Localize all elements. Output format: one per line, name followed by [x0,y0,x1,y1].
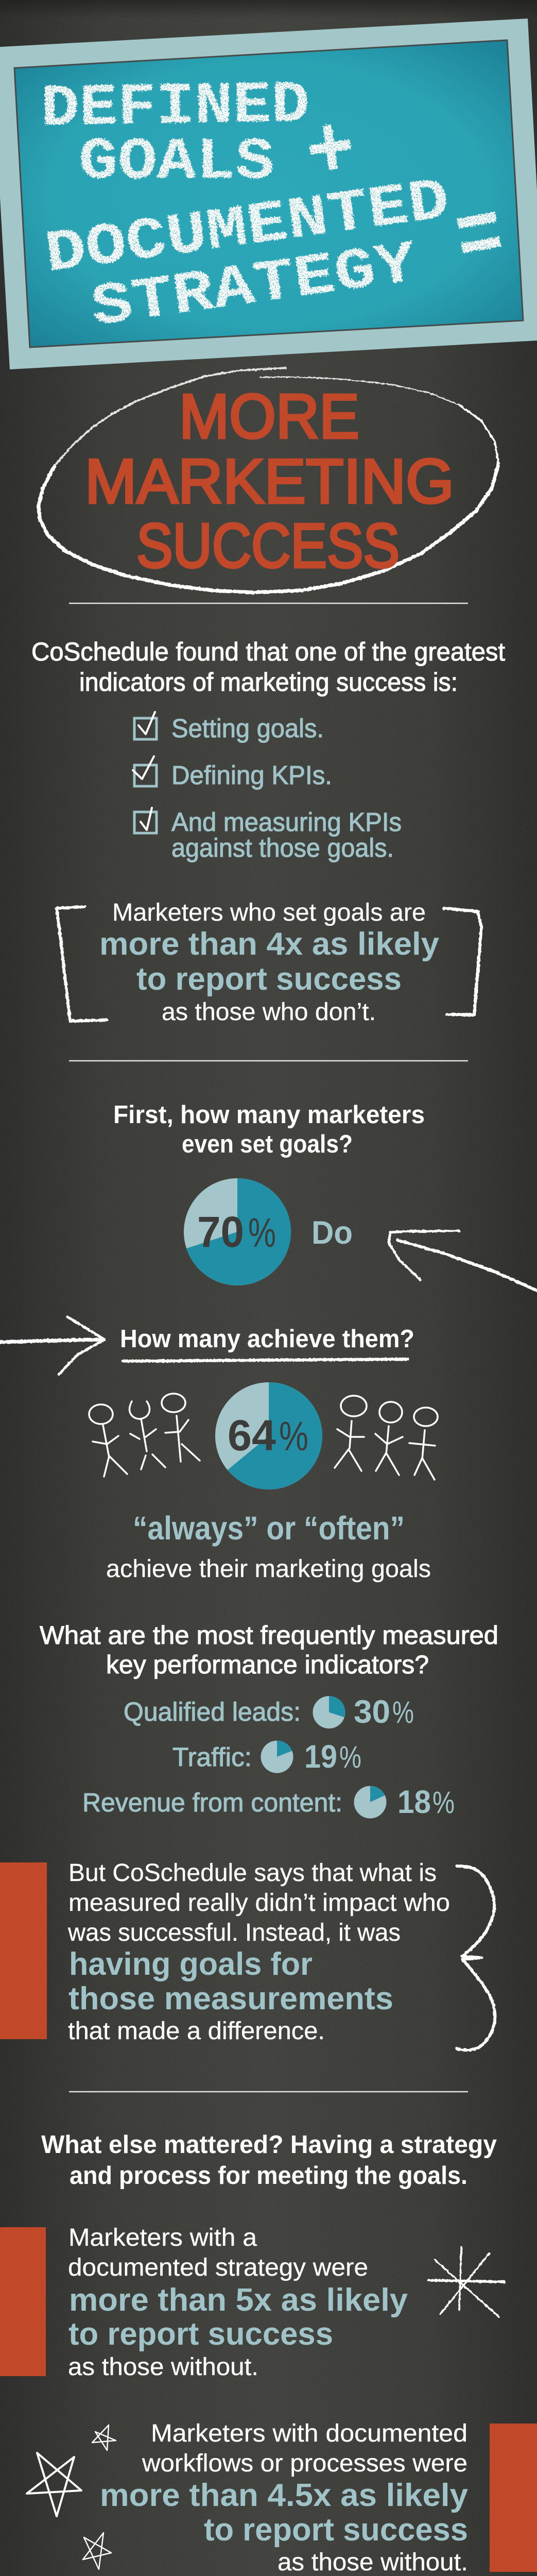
checklist item: defining KPIs [133,756,332,790]
stat: qualified leads 30% [124,1694,414,1730]
red accent bar [490,2424,537,2572]
heading: What are the most frequently measured [40,1621,498,1650]
stat: revenue from content 18%: 18 [397,1784,431,1820]
intro heading: indicators of marketing success is: [79,668,458,697]
pie chart: 64%: % [279,1413,308,1459]
body text: that made a difference. [68,2018,325,2045]
chalk underline [123,1359,408,1361]
body text: to report success [204,2512,468,2548]
section: how many marketers set goals [113,1101,537,1291]
caption: “always” or “often” [133,1510,405,1547]
panel: documented strategy 5x [0,2224,505,2381]
body text [100,2420,469,2576]
red accent bar [0,1862,47,2039]
body text: workflows or processes were [142,2450,467,2477]
icon: left stick figures [89,1394,200,1477]
icon: lower star [83,2533,111,2569]
more marketing success text: SUCCESS [136,511,400,581]
stat: revenue from content 18% [82,1784,455,1820]
icon: right stick figures [335,1396,438,1480]
body text: was successful. Instead, it was [67,1919,401,1946]
pie chart: 64%: 64 [228,1411,276,1460]
icon: chalk asterisk [429,2247,505,2317]
more marketing success text: MORE [179,381,359,451]
callout text: to report success [136,961,402,997]
title: chalk lettering: GOALS [79,129,274,196]
body text: more than 5x as likely [69,2282,408,2318]
title: chalk lettering: STRATEGY [88,231,421,343]
stat: traffic 19%: % [339,1740,361,1774]
checklist item: defining KPIs: Defining KPIs. [171,760,332,790]
stat: qualified leads 30%: Qualified leads: [124,1697,301,1726]
stat: revenue from content 18%: % [432,1785,455,1820]
callout: 4x as likely in chalk brackets [57,899,481,1026]
stat: traffic 19% [172,1739,361,1775]
checklist item: measuring KPIs: And measuring KPIs [171,807,402,837]
heading: what else mattered [41,2131,497,2190]
heading: what else mattered: What else mattered? Having a strategy [41,2131,497,2159]
title: chalk lettering: DEFINED [41,72,310,143]
chalk curly brace [457,1866,495,2050]
heading: what else mattered: and process for meeting the goals. [70,2162,467,2190]
pie chart: 70% [184,1178,291,1285]
stat: qualified leads 30%: 30 [354,1694,390,1730]
stat: traffic 19%: Traffic: [172,1742,252,1772]
body text: But CoSchedule says that what is [68,1859,437,1887]
body text: to report success [68,2316,333,2352]
callout text: as those who don’t. [162,998,376,1026]
icon: small star [92,2425,116,2450]
title: chalk lettering: DOCUMENTED [41,168,453,289]
intro heading [31,637,505,697]
heading: First, how many marketers [113,1101,425,1129]
red accent bar [0,2227,46,2376]
caption: achieve their marketing goals [106,1555,431,1583]
checklist item: setting goals: Setting goals. [171,714,324,743]
stat: qualified leads 30%: % [392,1695,414,1730]
body text: those measurements [68,1981,393,2016]
left chalk bracket [57,907,107,1021]
pie chart: 64% [215,1382,322,1489]
arrow: chalk arrow pointing to do [389,1231,537,1291]
intro heading: CoSchedule found that one of the greatest [31,637,505,666]
more marketing success text [85,381,454,581]
heading [40,1621,498,1679]
pie chart: 70%: % [248,1210,276,1256]
body text: Marketers with documented [151,2420,467,2447]
body text: measured really didn’t impact who [68,1889,450,1917]
caption [106,1510,431,1583]
panel: documented workflows 4.5x [27,2420,537,2576]
heading: more marketing success inside chalk circle [39,368,498,592]
panel: tilted chalkboard title [0,19,537,369]
callout text: more than 4x as likely [99,926,440,962]
chalk circle [39,368,498,592]
title: chalk lettering: = [448,183,512,295]
title: chalk lettering: + [300,100,362,206]
body text: as those without. [68,2353,258,2381]
body text: Marketers with a [68,2224,257,2251]
callout text: Marketers who set goals are [112,899,426,926]
body text: documented strategy were [68,2254,368,2281]
more marketing success text: MARKETING [85,446,454,516]
checklist item: measuring KPIs: against those goals. [171,833,394,862]
body text [67,1859,450,2045]
section: most frequently measured KPIs [40,1621,498,1820]
pie chart: 70%: 70 [197,1208,244,1256]
icon: large star [27,2453,81,2516]
heading: How many achieve them? [120,1325,414,1353]
stat: traffic 19%: 19 [304,1739,337,1775]
callout text [99,899,440,1026]
panel: having goals made a difference [0,1859,495,2050]
heading: even set goals? [182,1130,353,1158]
body text: having goals for [69,1946,313,1982]
section: how many achieve goals [0,1317,438,1583]
body text [68,2224,408,2381]
body text: as those without. [278,2549,468,2576]
heading: key performance indicators? [106,1650,429,1679]
right chalk bracket [444,908,481,1015]
body text: more than 4.5x as likely [100,2478,469,2513]
section: indicators of marketing success [31,637,505,862]
label: do: Do [311,1215,353,1251]
heading [113,1101,425,1158]
arrow: chalk arrow pointing to heading [0,1317,105,1375]
title: chalk lettering [41,72,512,343]
checklist item: measuring KPIs [134,807,402,862]
stat: revenue from content 18%: Revenue from content: [82,1788,342,1817]
